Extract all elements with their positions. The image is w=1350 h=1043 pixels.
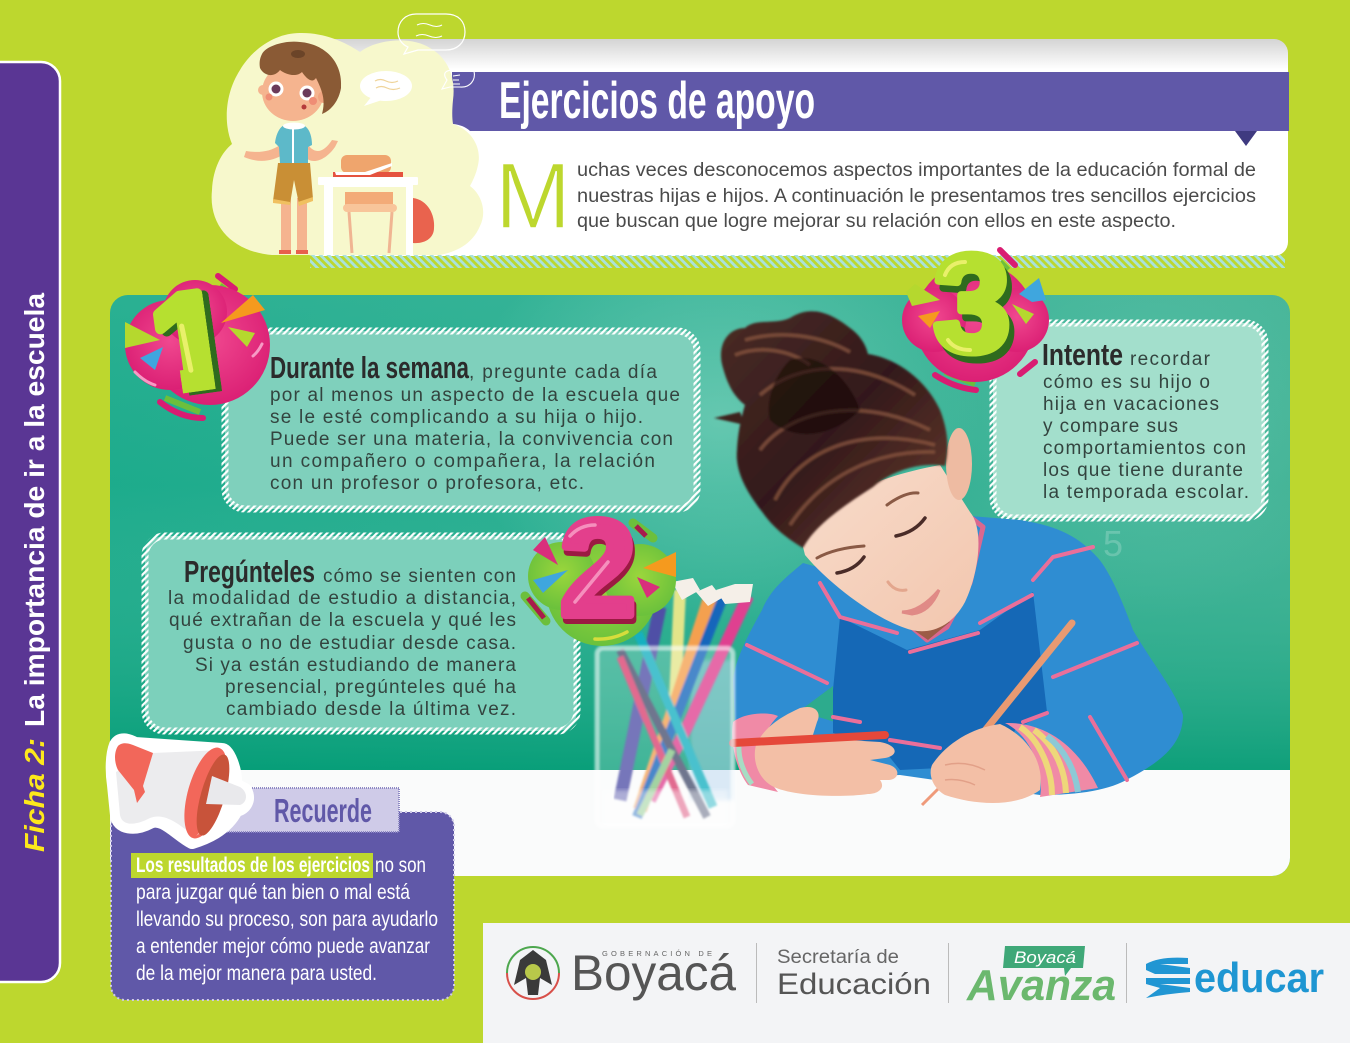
box 2 text: cómo se sienten con <box>323 566 516 587</box>
logo: educar <box>1146 954 1324 1001</box>
box 2 text: Si ya están estudiando de manera <box>195 655 516 676</box>
box 1 text <box>270 350 680 494</box>
footer: logos <box>483 923 1350 1043</box>
logo: gobernación de boyacá: Boyacá <box>571 945 736 1001</box>
callout text: a entender mejor cómo puede avanzar <box>136 934 430 958</box>
badge: number 3: 3 <box>939 234 1015 388</box>
logo: boyacá avanza: Avanza <box>966 961 1116 1010</box>
intro text: nuestras hijas e hijos. A continuación le presentamos tres sencillos ejercicios <box>577 185 1256 207</box>
box 3 text: los que tiene durante <box>1043 460 1243 481</box>
intro text: que buscan que logre mejorar su relación con ellos en este aspecto. <box>577 210 1176 232</box>
box 1 text: con un profesor o profesora, etc. <box>270 473 584 494</box>
badge: number 1: 1 <box>143 261 239 421</box>
box 1 text: por al menos un aspecto de la escuela que <box>270 385 680 406</box>
panel: teal chalkboard scene <box>110 295 1290 876</box>
red pencil <box>733 735 885 743</box>
left hand <box>755 707 897 796</box>
box 1 text: Puede ser una materia, la convivencia con <box>270 429 673 450</box>
intro text: uchas veces desconocemos aspectos importantes de la educación formal de <box>577 159 1256 181</box>
logo: gobernación de boyacá: GOBERNACIÓN DE <box>602 949 712 958</box>
speech bubbles <box>360 14 474 106</box>
box 3 text: cómo es su hijo o <box>1043 372 1210 393</box>
sweater <box>733 516 1183 795</box>
recuerde tab <box>218 788 399 832</box>
recuerde tab: Recuerde <box>274 792 372 829</box>
box 3 text: la temporada escolar. <box>1043 482 1249 503</box>
logo: secretaría de educación: Secretaría de <box>777 947 899 968</box>
sidebar: ficha title: Ficha 2: <box>19 738 50 852</box>
box 1 text: , pregunte cada día <box>469 362 657 383</box>
box 2 text: la modalidad de estudio a distancia, <box>168 588 516 609</box>
photo: girl drawing <box>714 311 1183 805</box>
stripes <box>747 517 1137 780</box>
badge: number 2 <box>525 492 676 649</box>
illustration: boy with desk <box>212 14 483 255</box>
box 2 text: presencial, pregúnteles qué ha <box>225 677 516 698</box>
teal gap <box>798 686 835 722</box>
sidebar: ficha title <box>0 62 60 982</box>
chest panel <box>833 592 1047 770</box>
orange pencil <box>983 623 1072 733</box>
intro text <box>577 159 1256 232</box>
badge: number 2: 2 <box>562 497 638 649</box>
sidebar: ficha title: La importancia de ir a la escuela <box>19 293 50 727</box>
neck shadow <box>908 615 950 640</box>
title: Ejercicios de apoyo <box>499 72 815 130</box>
box 1 text: se le esté complicando a su hija o hijo. <box>270 407 643 428</box>
badge: number 3 <box>902 227 1049 390</box>
callout text: Los resultados de los ejercicios <box>136 853 370 877</box>
face <box>800 465 978 631</box>
box 1 text: un compañero o compañera, la relación <box>270 451 655 472</box>
box 3 text: hija en vacaciones <box>1043 394 1219 415</box>
text box 2 background <box>145 536 577 731</box>
badge: number 1: 1 <box>150 264 245 424</box>
callout text: para juzgar qué tan bien o mal está <box>136 880 410 904</box>
text box 3 background <box>993 323 1265 518</box>
box 3 text: comportamientos con <box>1043 438 1246 459</box>
icon: megaphone <box>113 740 247 843</box>
text box 1 background <box>225 331 697 509</box>
logo: boyacá avanza: Boyacá <box>1014 948 1076 967</box>
box 3 text: recordar <box>1130 349 1211 370</box>
right hand <box>931 724 1041 803</box>
box 3 text: y compare sus <box>1043 416 1178 437</box>
logo: secretaría de educación: Educación <box>777 968 931 1001</box>
callout text: llevando su proceso, son para ayudarlo <box>136 907 438 931</box>
highlight <box>131 853 373 878</box>
panel: recuerde callout <box>111 788 454 1000</box>
hatched strip <box>310 255 1285 268</box>
callout text: no son <box>375 853 426 877</box>
badge: number 3: 3 <box>934 227 1010 381</box>
badge: number 1 <box>125 261 270 424</box>
cuffs <box>732 714 778 792</box>
logo: secretaría de educación <box>777 947 931 1001</box>
logo: educar: educar <box>1194 954 1324 1001</box>
heading: intente: Intente <box>1042 337 1123 372</box>
pencil glass <box>597 578 753 826</box>
box 3 text <box>1042 337 1249 503</box>
box 2 text <box>168 554 516 720</box>
chalk numeral: 5 <box>1103 523 1123 564</box>
box 2 text: gusta o no de estudiar desde casa. <box>183 633 516 654</box>
desk with book <box>318 155 434 255</box>
hair <box>714 311 947 548</box>
badge: number 2: 2 <box>560 492 636 644</box>
box 2 text: qué extrañan de la escuela y qué les <box>169 610 516 631</box>
panel: intro card <box>300 39 1289 268</box>
box 2 text: cambiado desde la última vez. <box>226 699 516 720</box>
heading: durante la semana: Durante la semana <box>270 350 470 385</box>
heading: pregúnteles: Pregúnteles <box>184 554 315 589</box>
boy <box>244 42 341 254</box>
callout text: de la mejor manera para usted. <box>136 961 377 985</box>
facial features <box>817 493 939 614</box>
callout text <box>136 853 438 985</box>
drop cap: M <box>495 143 571 248</box>
